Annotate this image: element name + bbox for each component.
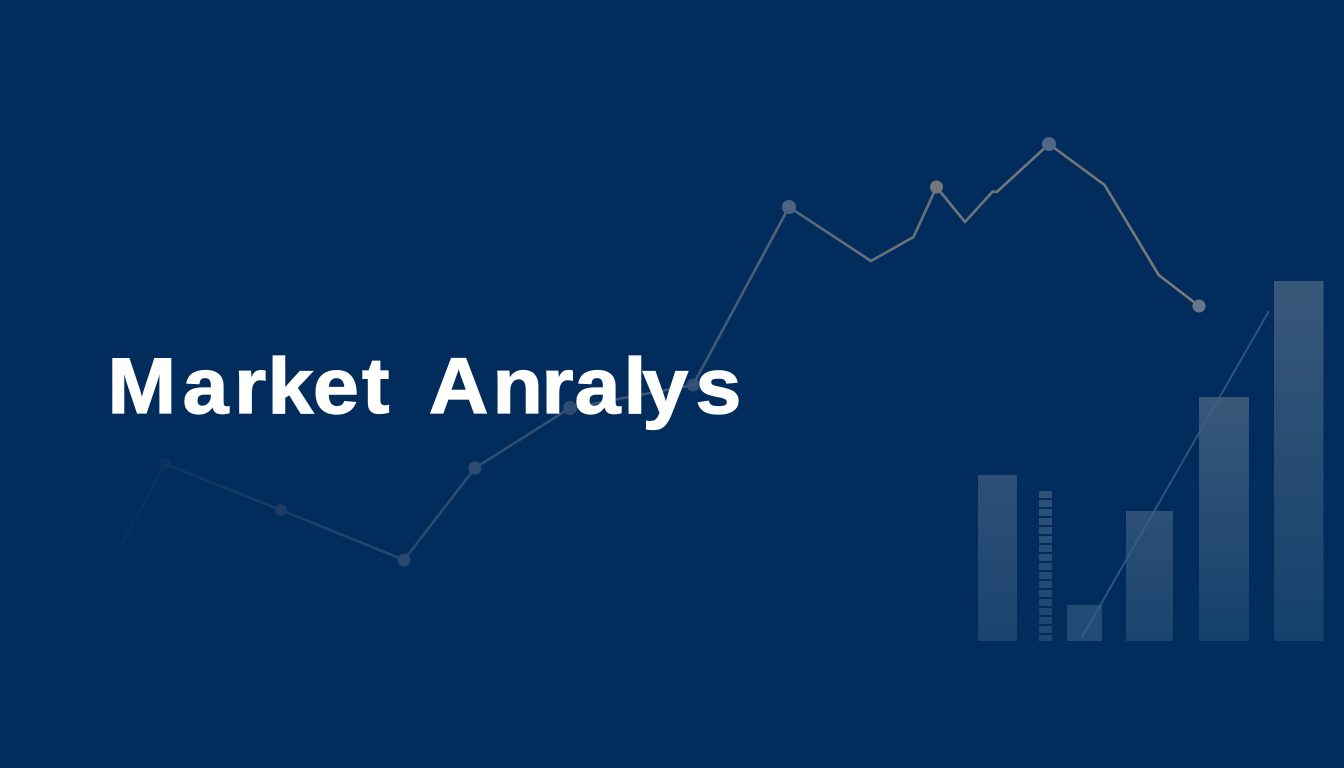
line chart [106,137,1206,573]
segmented bar 2 [1039,491,1052,641]
data point over title [686,378,700,392]
bar 1 [978,475,1017,641]
bar 3 [1067,605,1102,641]
trend line [1082,311,1269,637]
bar 4 [1126,511,1173,641]
data points [159,137,1206,566]
data line [106,144,1199,573]
title: Market Anralys [108,343,741,431]
bar chart [978,281,1324,641]
bar 5 [1199,397,1249,641]
bar 6 [1274,281,1324,641]
